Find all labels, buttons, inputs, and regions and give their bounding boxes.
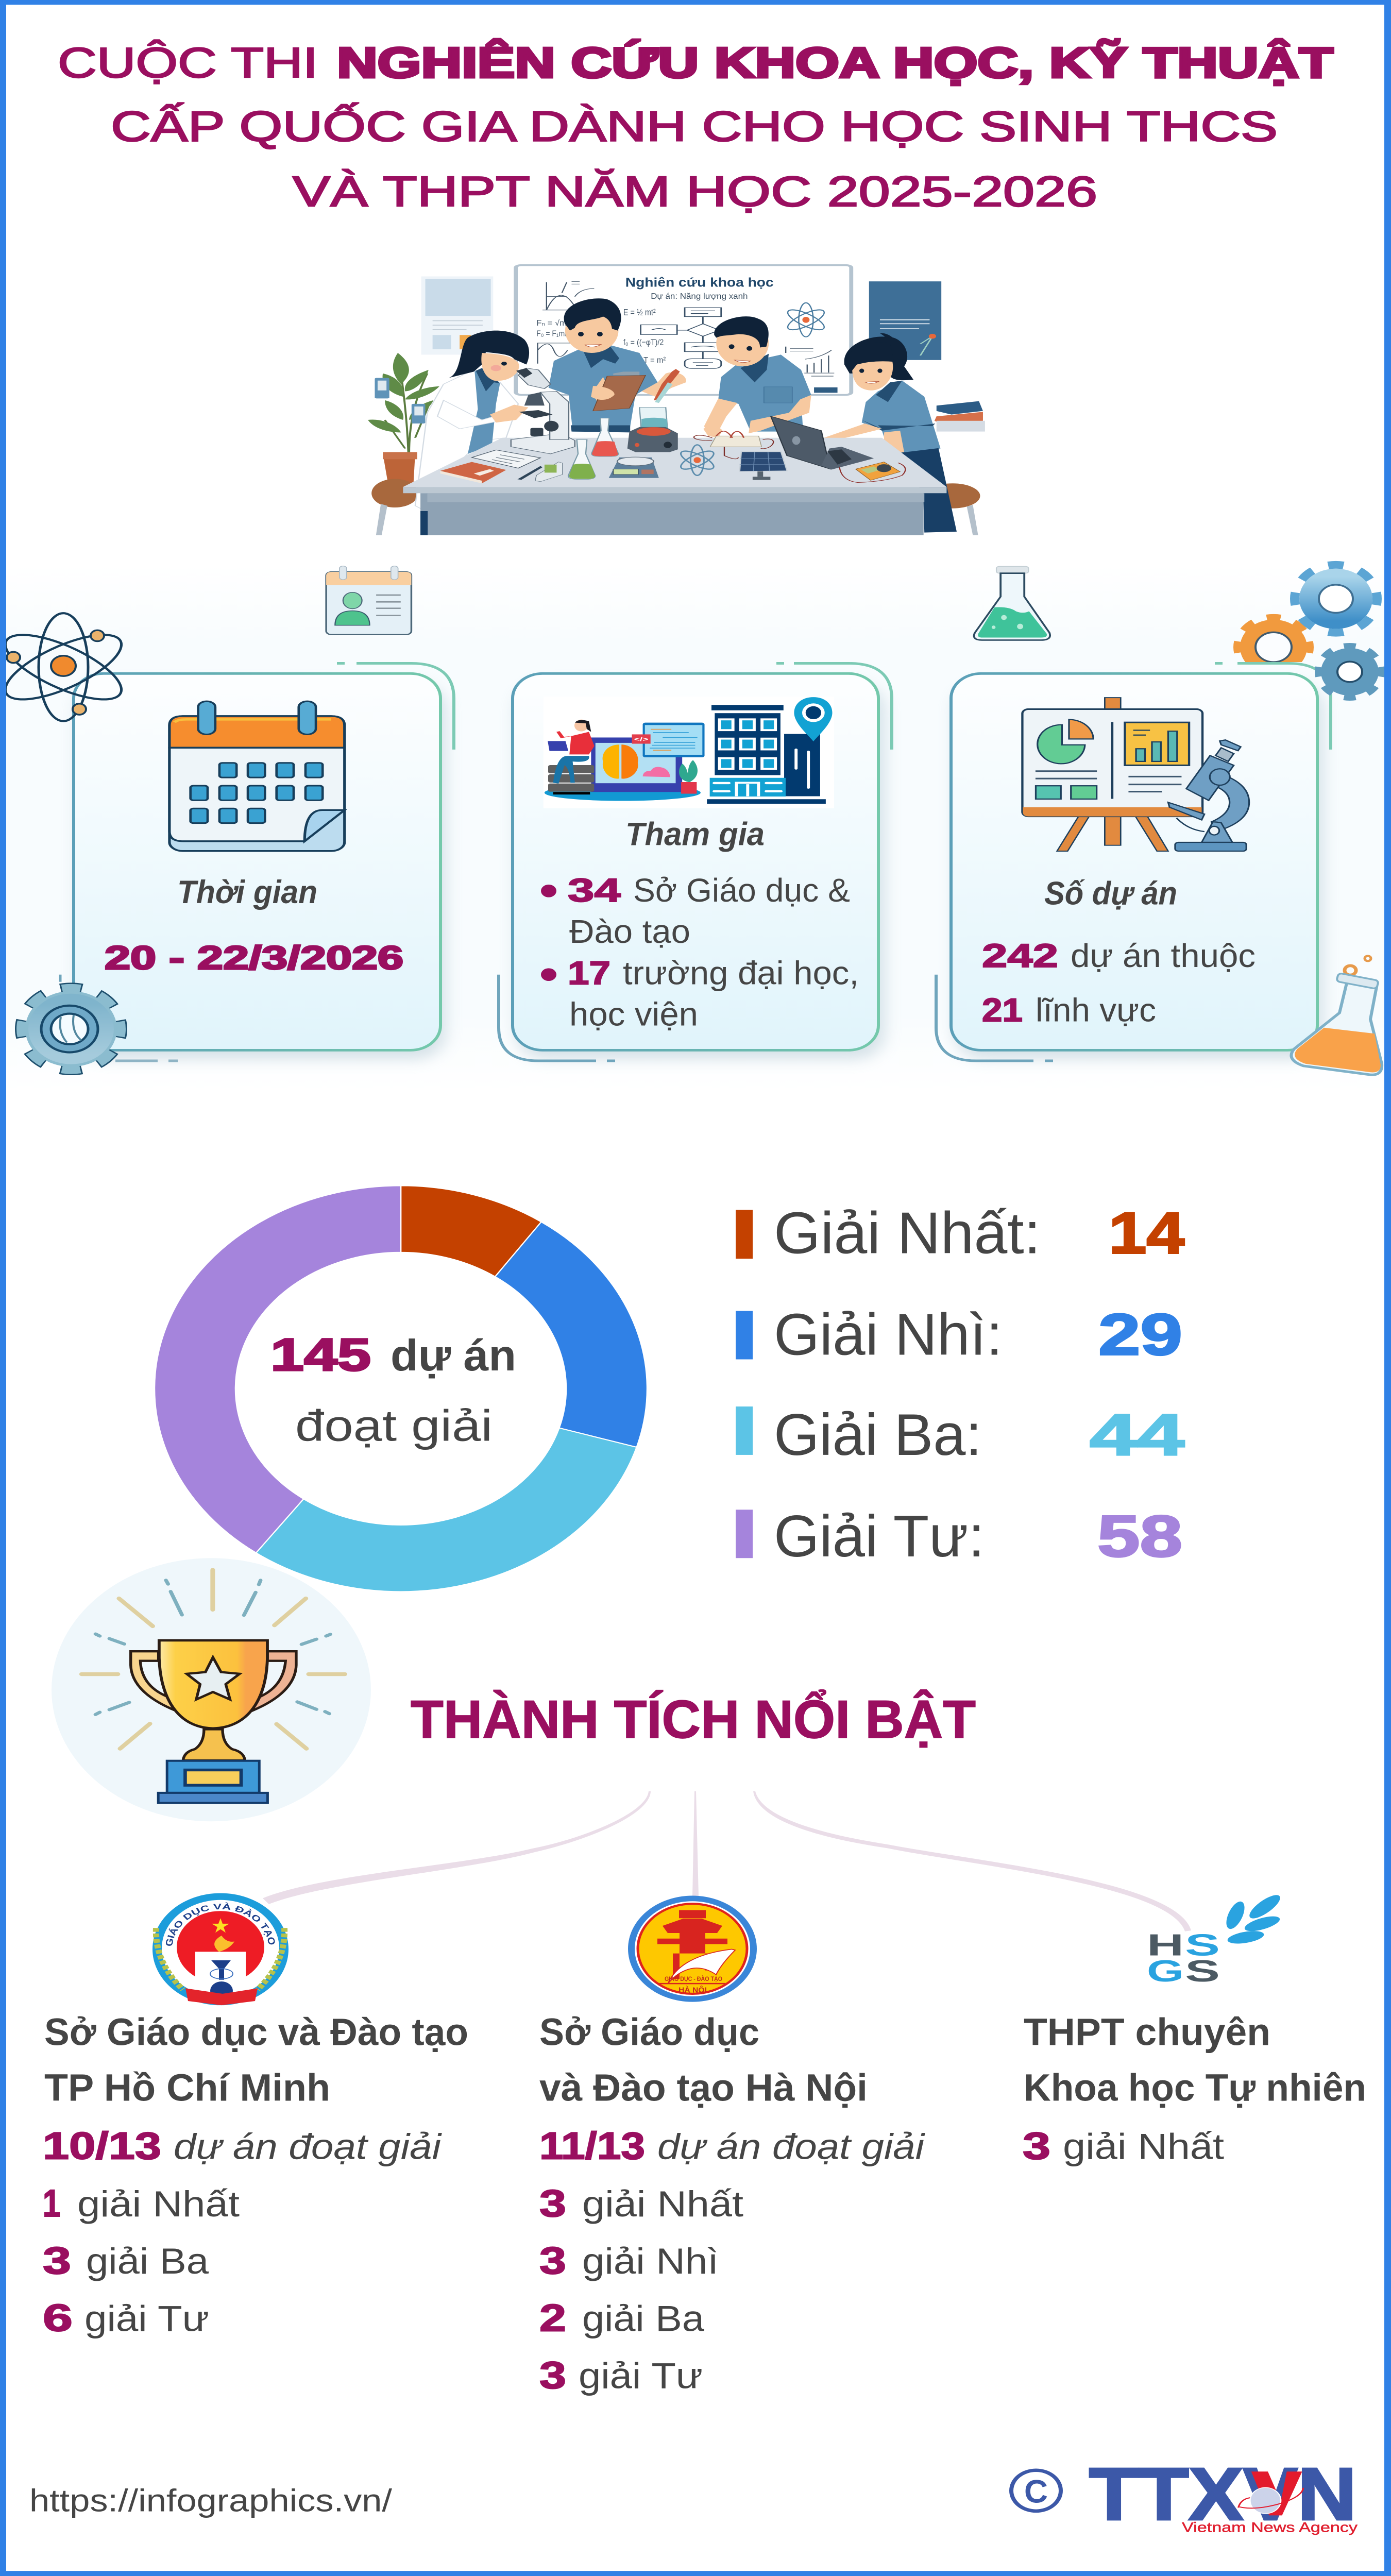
list: projects — [982, 937, 1256, 1029]
connectors from heading to organisations — [263, 1791, 1191, 1931]
text block: Hanoi results: 3 — [539, 2354, 566, 2397]
text block: Ho Chi Minh City results: 3 — [43, 2240, 71, 2282]
list: participants: Sở Giáo dục & — [633, 872, 850, 909]
whiteboard: Dự án: Năng lượng xanh — [651, 292, 748, 300]
student 4 — [821, 333, 957, 533]
title — [58, 39, 1333, 215]
list: participants: học viện — [569, 996, 698, 1033]
text block: Hanoi results: 2 — [539, 2297, 566, 2340]
icon: technology and building: </> — [634, 736, 648, 743]
whiteboard: E = ½ mt² — [623, 308, 656, 317]
list: participants — [541, 872, 859, 1033]
logo: HSGS: G — [1147, 1954, 1184, 1988]
whiteboard: f₀ = ((−φT)/2 — [623, 337, 664, 347]
text block: Hanoi results: 3 — [539, 2240, 566, 2282]
student 3 — [703, 316, 811, 438]
logo: HSGS: S — [1185, 1954, 1220, 1988]
segment: fourth prize 58 — [155, 1185, 401, 1553]
title: CẤP QUỐC GIA DÀNH CHO HỌC SINH THCS — [111, 103, 1278, 150]
icon: trophy badge — [52, 1558, 371, 1821]
legend row: Giải Nhì: 29 — [1098, 1302, 1182, 1367]
icon: atom — [0, 613, 132, 721]
text block: Hanoi results: Sở Giáo dục — [539, 2011, 759, 2054]
legend row: Giải Nhì: Giải Nhì: — [774, 1302, 1003, 1367]
multimeter — [840, 462, 905, 482]
logo: TTXVN: Vietnam News Agency — [1182, 2520, 1358, 2535]
legend row: Giải Ba: Giải Ba: — [774, 1402, 982, 1467]
poster right — [869, 281, 941, 360]
text block: Hanoi results: và Đào tạo Hà Nội — [539, 2066, 868, 2109]
list: participants: 34 — [568, 872, 621, 909]
solar panel — [740, 452, 787, 480]
panel: info card 3 (projects) — [936, 664, 1331, 1061]
text block: Ho Chi Minh City results: giải Ba — [86, 2241, 209, 2281]
legend row: Giải Nhất: 14 — [1109, 1200, 1184, 1266]
legend: prizes — [736, 1200, 1184, 1569]
whiteboard: Fₙ = √m — [536, 318, 567, 327]
heading: Thời gian: Thời gian — [177, 874, 317, 910]
panel: info card 2 (participants) — [499, 664, 892, 1061]
icon: gear bottom left — [21, 975, 121, 1070]
donut centre label: đoạt giải — [295, 1401, 493, 1451]
legend row: Giải Nhì — [736, 1302, 1182, 1367]
text block: Ho Chi Minh City results: giải Nhất — [77, 2183, 240, 2224]
text block: Hanoi results: 3 — [539, 2182, 566, 2225]
microscope — [511, 368, 575, 454]
footer url: https://infographics.vn/ — [29, 2484, 392, 2518]
text block: Ho Chi Minh City results: 1 — [43, 2182, 60, 2225]
text block: Ho Chi Minh City results: giải Tư — [84, 2298, 209, 2339]
segment: third prize 44 — [256, 1428, 637, 1591]
text block: Hanoi results: giải Nhất — [582, 2183, 743, 2224]
legend row: Giải Tư — [736, 1503, 1182, 1569]
whiteboard: Nghiên cứu khoa học — [625, 275, 774, 290]
logo: Ho Chi Minh education department: GIÁO DỤC VÀ ĐÀO TẠO — [166, 1902, 275, 1946]
text block: Ho Chi Minh City results: 6 — [43, 2297, 73, 2340]
text block: Hanoi results — [539, 2011, 925, 2397]
atom model — [678, 445, 717, 476]
icon: profile calendar — [326, 566, 411, 635]
text block: Hanoi results: dự án đoạt giải — [657, 2127, 925, 2167]
icon: calendar — [169, 701, 345, 851]
panel: info card 1 (time) — [74, 664, 454, 1061]
legend row: Giải Ba: 44 — [1090, 1402, 1184, 1467]
logo: TTXVN: TTXVN — [1089, 2453, 1356, 2535]
heading: Tham gia: Tham gia — [625, 816, 765, 852]
segment: second prize 29 — [495, 1222, 647, 1447]
sensors — [375, 378, 426, 423]
logo: HSGS: S — [1185, 1928, 1220, 1962]
illustration: students doing science research — [368, 265, 985, 535]
flasks — [568, 418, 618, 479]
list: projects: 242 — [982, 937, 1058, 974]
logo: TTXVN: C — [1024, 2473, 1048, 2510]
poster left — [421, 276, 493, 354]
list: participants: 17 — [568, 955, 610, 992]
balance scale — [609, 457, 659, 478]
text block: Ho Chi Minh City results: TP Hồ Chí Minh — [44, 2066, 330, 2109]
logo: HSGS: H — [1147, 1928, 1184, 1962]
logo: Ho Chi Minh education department — [152, 1893, 289, 2005]
student 1 in lab coat — [415, 331, 529, 512]
books — [935, 401, 985, 432]
whiteboard — [516, 265, 851, 395]
value: dates: 20 - 22/3/2026 — [105, 939, 403, 976]
text block: HSGS results: 3 — [1023, 2125, 1050, 2167]
donut chart: 145 winning projects — [155, 1185, 647, 1591]
logo: Hanoi education department — [628, 1896, 757, 2002]
stools — [371, 479, 980, 535]
text block: Ho Chi Minh City results: dự án đoạt giải — [174, 2127, 442, 2167]
logo: Hanoi education department: GIÁO DỤC - ĐÀO TẠO — [665, 1975, 722, 1982]
plant — [368, 353, 439, 489]
text block: Hanoi results: 11/13 — [539, 2125, 645, 2167]
text block: Hanoi results: giải Nhì — [582, 2241, 719, 2281]
legend row: Giải Ba — [736, 1402, 1184, 1467]
title: VÀ THPT NĂM HỌC 2025-2026 — [293, 168, 1097, 215]
hot plate and beaker — [627, 408, 678, 452]
breadboard — [694, 431, 773, 459]
text block: Ho Chi Minh City results — [43, 2011, 468, 2340]
donut centre label: 145 — [270, 1329, 371, 1380]
table — [403, 438, 946, 535]
legend row: Giải Tư: Giải Tư: — [774, 1503, 985, 1569]
whiteboard: T = m² — [643, 355, 666, 364]
icon: green flask — [974, 566, 1050, 640]
icon: technology and building — [544, 697, 834, 808]
donut centre label — [270, 1329, 516, 1451]
legend row: Giải Tư: 58 — [1097, 1503, 1182, 1569]
text block: Hanoi results: giải Ba — [582, 2298, 704, 2339]
text block: Ho Chi Minh City results: 10/13 — [43, 2125, 161, 2167]
logo: HSGS — [1147, 1891, 1284, 1988]
list: projects: 21 — [982, 992, 1023, 1029]
heading: Số dự án: Số dự án — [1044, 875, 1177, 911]
icon: presentation board and microscope — [1022, 698, 1249, 851]
title: CUỘC THI — [58, 39, 318, 87]
student 2 with clipboard — [549, 298, 686, 432]
list: projects: lĩnh vực — [1036, 992, 1156, 1029]
notebooks, pen, meter on table — [440, 450, 563, 483]
text block: Hanoi results: giải Tư — [579, 2355, 703, 2396]
text block: HSGS results: THPT chuyên — [1024, 2011, 1270, 2054]
segment: first prize 14 — [401, 1185, 541, 1277]
text block: HSGS results: giải Nhất — [1063, 2126, 1224, 2167]
text block: HSGS results — [1023, 2011, 1366, 2167]
whiteboard: F₀ = F₁mL — [536, 329, 569, 338]
logo: Hanoi education department: HÀ NỘI — [678, 1986, 707, 1994]
laptop — [771, 416, 874, 469]
list: projects: dự án thuộc — [1071, 937, 1256, 974]
icon: orange flask — [1291, 956, 1382, 1075]
text block: Ho Chi Minh City results: Sở Giáo dục và Đào tạo — [44, 2011, 468, 2054]
list: participants: trường đại học, — [623, 955, 859, 992]
heading: outstanding achievements: THÀNH TÍCH NỔI BẬT — [411, 1689, 976, 1749]
title: NGHIÊN CỨU KHOA HỌC, KỸ THUẬT — [337, 39, 1333, 87]
legend row: Giải Nhất: Giải Nhất: — [774, 1200, 1041, 1266]
donut centre label: dự án — [391, 1331, 516, 1380]
list: participants: Đào tạo — [569, 913, 690, 950]
icon: gears top right — [1237, 565, 1381, 698]
